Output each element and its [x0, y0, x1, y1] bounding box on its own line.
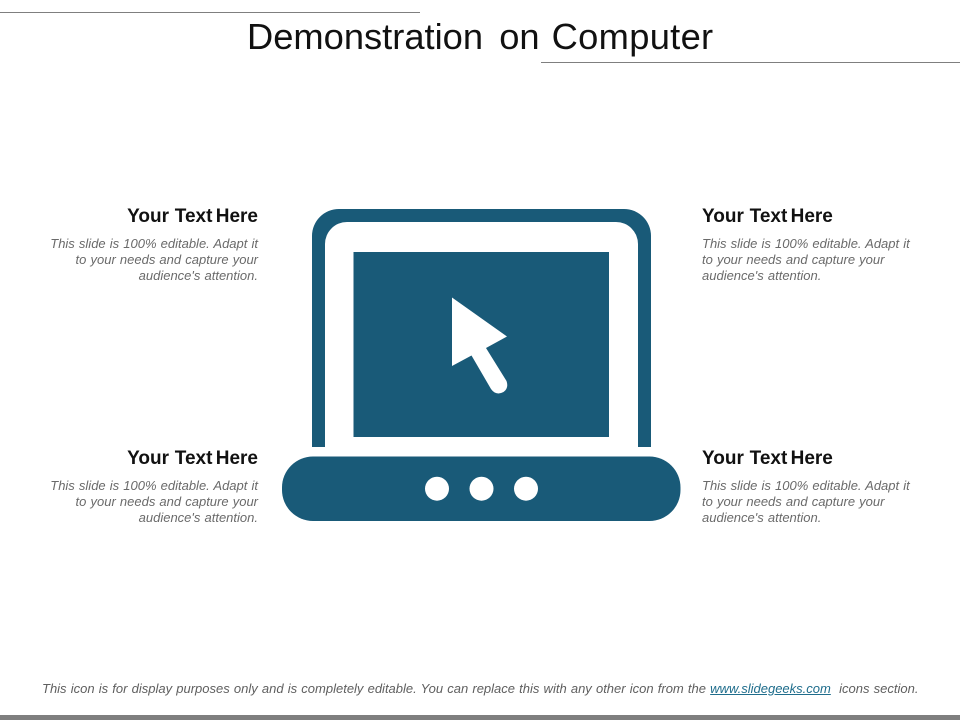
heading: bottom left: Your Text Here: [127, 448, 258, 469]
heading: top right: Your Text Here: [702, 206, 833, 227]
base dots: [425, 477, 538, 501]
body text: top left: audience's attention.: [139, 268, 258, 283]
body text: top right: [702, 236, 910, 283]
body text: top right: audience's attention.: [702, 268, 821, 283]
laptop base: [282, 456, 680, 521]
heading: bottom right: Your Text Here: [702, 448, 833, 469]
body text: top left: to your needs and capture your: [76, 252, 258, 267]
text block: bottom right: [702, 448, 910, 525]
body text: top left: This slide is 100% editable. Adapt it: [50, 236, 258, 250]
cursor arrow: [452, 298, 507, 393]
footer bar: [0, 715, 960, 720]
body text: top right: This slide is 100% editable. Adapt it: [702, 236, 910, 250]
title: Demonstration on Computer: [247, 16, 713, 57]
body text: bottom right: [702, 478, 910, 525]
heading: top left: Your Text Here: [127, 206, 258, 227]
footer note: This icon is for display purposes only and is completely editable. You can replace this with any other icon from the www.slidegeeks.com icons section.: [42, 681, 918, 696]
body text: bottom left: to your needs and capture your: [76, 494, 258, 509]
text block: top left: [50, 206, 258, 283]
body text: bottom left: [50, 478, 258, 525]
body text: bottom right: This slide is 100% editable. Adapt it: [702, 478, 910, 492]
text block: top right: [702, 206, 910, 283]
body text: bottom right: audience's attention.: [702, 510, 821, 525]
body text: bottom left: This slide is 100% editable. Adapt it: [50, 478, 258, 492]
body text: bottom left: audience's attention.: [139, 510, 258, 525]
body text: top left: [50, 236, 258, 283]
laptop lid outline: [312, 209, 651, 447]
text block: bottom left: [50, 448, 258, 525]
laptop screen: [354, 252, 609, 437]
body text: top right: to your needs and capture your: [702, 252, 884, 267]
body text: bottom right: to your needs and capture your: [702, 494, 884, 509]
